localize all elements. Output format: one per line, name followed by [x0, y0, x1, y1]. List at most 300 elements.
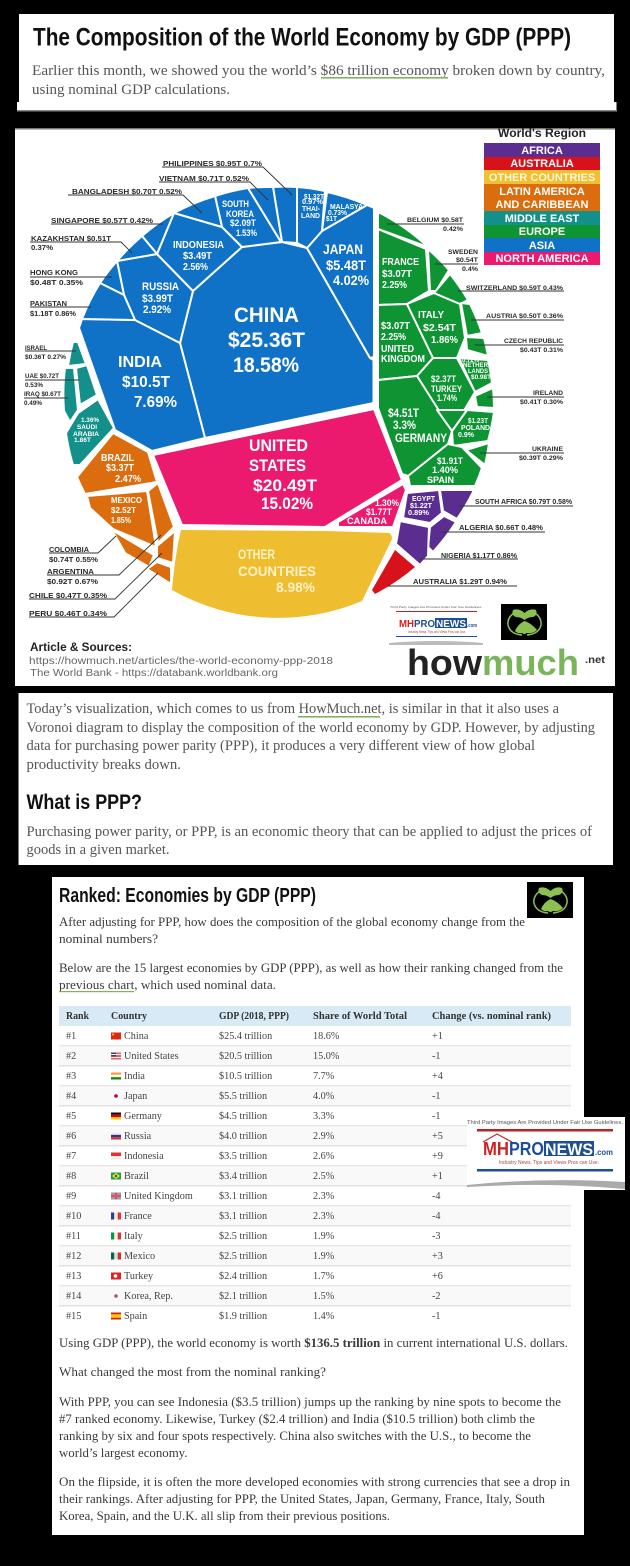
row 12: Mexico: [124, 1251, 155, 1262]
cell: Egypt: $1.22T: [410, 501, 432, 510]
closing text: Korea, Spain, and the U.K. all slip from their previous positions.: [59, 1509, 390, 1523]
row 6: [59, 1126, 571, 1146]
closing text: [59, 1336, 571, 1523]
label: Sweden: $0.54T: [456, 257, 478, 264]
logo: howmuch.net: .net: [585, 655, 606, 666]
row 15: -1: [432, 1311, 440, 1322]
row 13: [59, 1271, 571, 1286]
cells: Middle East: 1.36%: [81, 417, 99, 424]
row 2: [59, 1046, 571, 1066]
logo: MHProNews table watermark: Industry News, Tips and Views Pros can Use.: [499, 1160, 599, 1166]
logo: MHProNews chart watermark: .com: [467, 623, 477, 629]
label: Israel: ISRAEL: [25, 345, 47, 352]
row 5: #5: [66, 1111, 76, 1122]
cell: Netherlands: $0.98T: [471, 374, 491, 381]
cell: Malaysia: 0.73%: [328, 210, 348, 217]
cell: Spain: $1.91T: [437, 456, 463, 467]
row 8: [59, 1166, 571, 1186]
panel: explanation: [18, 693, 613, 865]
legend: world's region: AUSTRALIA: [510, 158, 574, 170]
legend: world's region: AFRICA: [521, 145, 563, 157]
cell: United Kingdom: $3.07T: [381, 321, 410, 332]
paragraph: PPP definition: [26, 824, 592, 858]
cell: Poland: [452, 410, 494, 446]
paragraph: PPP definition: goods in a given market.: [26, 842, 170, 858]
label: Sweden: 0.4%: [462, 266, 478, 273]
row 8: $3.4 trillion: [219, 1171, 267, 1182]
cells: Middle East: [63, 342, 114, 465]
label: Hong Kong: $0.48T 0.35%: [30, 278, 83, 287]
row 3: India: [124, 1071, 145, 1082]
row 11: Italy: [124, 1231, 144, 1242]
row 9: $3.1 trillion: [219, 1191, 267, 1202]
label: Ukraine: [480, 446, 564, 462]
cell: China: CHINA: [234, 304, 299, 327]
legend: world's region: EUROPE: [519, 226, 565, 238]
cell: Mexico: $2.52T: [111, 505, 137, 515]
logo: MHProNews chart watermark: PRO: [414, 618, 435, 630]
closing text: On the flipside, it is often the more developed economies with strong currencies that see a drop in: [59, 1475, 571, 1489]
legend: world's region: NORTH AMERICA: [495, 253, 589, 265]
logo: MHProNews table watermark: MH: [483, 1139, 509, 1159]
cell: Thailand: $1.32T: [304, 194, 325, 201]
row 7: 2.6%: [313, 1151, 335, 1162]
cell: Poland: POLAND: [461, 423, 491, 432]
intro text: Earlier this month, we showed you the world’s $86 trillion economy broken down by country,: [32, 63, 605, 79]
cell: Poland: $1.23T: [468, 416, 488, 425]
logo: green emblem: [527, 882, 573, 918]
cell: Japan: JAPAN: [323, 242, 363, 257]
label: UAE: [25, 373, 79, 389]
cell: Spain: 1.40%: [432, 465, 459, 476]
cell: Egypt: EGYPT: [412, 494, 435, 503]
cell: United Kingdom: UNITED: [381, 344, 414, 355]
cell: India: $10.5T: [122, 374, 170, 391]
row 7: #7: [66, 1151, 76, 1162]
label: Iraq: 0.49%: [24, 400, 42, 407]
table header: [59, 1006, 571, 1026]
panel: ranked economies: [52, 877, 584, 1535]
cell: China: [180, 242, 374, 438]
cell: Other Countries: [172, 530, 392, 618]
label: South Africa: SOUTH AFRICA $0.79T 0.58%: [475, 497, 572, 506]
intro paragraphs: previous chart, which used nominal data.: [59, 978, 276, 992]
article and sources: https://howmuch.net/articles/the-world-economy-ppp-2018: [29, 656, 334, 667]
closing text: With PPP, you can see Indonesia ($3.5 trillion) jumps up the ranking by nine spots to become the: [59, 1395, 561, 1409]
row 11: [59, 1231, 571, 1246]
closing text: their rankings. After adjusting for PPP, the United States, Japan, Germany, France, Italy, South: [59, 1492, 546, 1506]
cell: Japan: [307, 205, 374, 358]
row 1: China: [124, 1031, 149, 1042]
row 8: #8: [66, 1171, 76, 1182]
closing text: #7 ranked economy. Likewise, Turkey ($2.4 trillion) and India ($10.5 trillion) both climb the: [59, 1412, 535, 1426]
row 6: 2.9%: [313, 1131, 335, 1142]
label: Austria: AUSTRIA $0.50T 0.36%: [486, 313, 563, 320]
paragraph: visualization: Today’s visualization, which comes to us from HowMuch.net, is similar in that it also uses a: [26, 701, 560, 717]
row 11: 1.9%: [313, 1231, 335, 1242]
cell: Russia: RUSSIA: [142, 281, 179, 293]
row 8: 2.5%: [313, 1171, 335, 1182]
cell: France: 2.25%: [382, 279, 408, 291]
cell: Turkey: TURKEY: [431, 384, 462, 394]
cell: France: $3.07T: [382, 268, 413, 280]
intro paragraphs: [59, 915, 563, 992]
cell: Canada: 1.30%: [375, 498, 399, 509]
logo: howmuch.net: [407, 642, 606, 683]
cell: Indonesia: $3.49T: [183, 250, 213, 262]
row 13: +6: [432, 1271, 443, 1282]
label: Kazakhstan: [30, 234, 132, 253]
cells: Middle East: 1.86T: [74, 437, 92, 444]
row 4: Japan: [124, 1091, 147, 1102]
label: Ukraine: UKRAINE: [532, 446, 564, 453]
cell: Russia: $3.99T: [142, 293, 173, 305]
row 6: $4.0 trillion: [219, 1131, 267, 1142]
row 12: 1.9%: [313, 1251, 335, 1262]
cell: United States: STATES: [249, 457, 306, 475]
cell: Thailand: THAI-: [302, 206, 321, 213]
cell: Germany: 3.3%: [393, 420, 416, 432]
intro text: using nominal GDP calculations.: [32, 82, 230, 98]
cell: China: 18.58%: [233, 354, 299, 377]
label: Pakistan: PAKISTAN: [30, 299, 67, 308]
cells: other Europe: [378, 212, 494, 465]
logo: MHProNews table watermark: NEWS: [545, 1140, 593, 1159]
row 13: Turkey: [124, 1271, 154, 1282]
cell: Other Countries: OTHER: [238, 547, 275, 562]
label: Kazakhstan: 0.37%: [31, 243, 53, 252]
paragraph: visualization: productivity breaks down.: [26, 757, 181, 773]
panel: voronoi chart: [15, 128, 615, 686]
cell: Indonesia: INDONESIA: [173, 239, 224, 251]
closing text: Using GDP (PPP), the world economy is worth $136.5 trillion in current international U.S. dollars.: [59, 1336, 568, 1350]
row 2: United States: [124, 1051, 179, 1062]
label: Argentina: [47, 535, 161, 586]
cell: Russia: [117, 254, 193, 343]
cell: Malaysia: [322, 192, 367, 231]
row 5: $4.5 trillion: [219, 1111, 267, 1122]
cell: Malaysia: MALASYA: [330, 204, 363, 211]
row 13: $2.4 trillion: [219, 1271, 267, 1282]
row 8: Brazil: [124, 1171, 149, 1182]
table header: Country: [111, 1011, 147, 1022]
row 10: -4: [432, 1211, 440, 1222]
row 15: [66, 1311, 440, 1322]
row 12: +3: [432, 1251, 443, 1262]
row 3: #3: [66, 1071, 76, 1082]
cell: Netherlands: [459, 357, 492, 392]
row 11: $2.5 trillion: [219, 1231, 267, 1242]
row 14: Korea, Rep.: [124, 1291, 173, 1302]
cell: France: FRANCE: [382, 256, 419, 268]
legend: world's region: AND CARIBBEAN: [496, 199, 588, 211]
logo: MHProNews chart watermark: NEWS: [436, 619, 466, 630]
cells: other Asia: [82, 187, 297, 320]
cell: Italy: $2.54T: [423, 322, 457, 334]
cell: Turkey: [417, 358, 475, 431]
logo: howmuch.net: much: [482, 642, 579, 683]
cell: United States: 15.02%: [261, 495, 313, 513]
row 11: -3: [432, 1231, 440, 1242]
cell: Thailand: [297, 187, 325, 248]
row 2: $20.5 trillion: [219, 1051, 272, 1062]
cell: Italy: [407, 293, 465, 358]
label: Ukraine: $0.39T 0.29%: [519, 455, 563, 462]
closing text: ranking by six and four spots respectively. China also switches with the U.S., to become the: [59, 1429, 531, 1443]
row 14: $2.1 trillion: [219, 1291, 267, 1302]
cells: Middle East: ARABIA: [73, 431, 99, 438]
cell: Indonesia: 2.56%: [183, 261, 209, 273]
label: UAE: 0.53%: [25, 382, 43, 389]
paragraph: visualization: data for purchasing power parity (PPP), it produces a very different view of how global: [26, 738, 535, 754]
row 4: $5.5 trillion: [219, 1091, 267, 1102]
row 7: +9: [432, 1151, 443, 1162]
row 9: [59, 1191, 571, 1206]
row 15: Spain: [124, 1311, 147, 1322]
label: Iraq: [24, 391, 68, 407]
label: Argentina: $0.92T 0.67%: [47, 577, 98, 586]
row 5: 3.3%: [313, 1111, 335, 1122]
label: UAE: UAE $0.72T: [25, 373, 59, 380]
logo: MHProNews chart watermark: [389, 605, 483, 645]
cell: Other Countries: 8.98%: [276, 580, 315, 595]
row 15: #15: [66, 1311, 81, 1322]
label: Sweden: SWEDEN: [448, 249, 478, 256]
logo: MHProNews chart watermark: Industry News, Tips and Views Pros can Use.: [408, 630, 466, 634]
row 5: [59, 1111, 571, 1126]
cell: Germany: [378, 376, 452, 476]
paragraph: visualization: Voronoi diagram to display the composition of the world economy by GDP. However, by adjusting: [26, 720, 596, 736]
row 3: [59, 1071, 571, 1086]
cell: Brazil: [77, 433, 157, 494]
cell: Turkey: 1.74%: [437, 393, 457, 403]
label: Czech Republic: [475, 338, 564, 354]
cell: Japan: 4.02%: [333, 273, 369, 288]
row 5: Germany: [124, 1111, 163, 1122]
row 15: 1.4%: [313, 1311, 335, 1322]
intro paragraphs: Below are the 15 largest economies by GDP (PPP), as well as how their ranking changed from the: [59, 961, 563, 975]
row 14: -2: [432, 1291, 440, 1302]
cell: Poland: 0.9%: [458, 430, 474, 439]
row 8: +1: [432, 1171, 443, 1182]
cell: Brazil: BRAZIL: [101, 453, 134, 464]
cell: Spain: [408, 444, 482, 486]
legend: world's region: MIDDLE EAST: [505, 213, 580, 225]
cell: United States: UNITED: [249, 437, 308, 455]
cell: Netherlands: NETHER: [463, 362, 488, 369]
cell: United States: $20.49T: [253, 477, 317, 495]
intro paragraphs: After adjusting for PPP, how does the composition of the global economy change from the: [59, 915, 525, 929]
row 7: Indonesia: [124, 1151, 164, 1162]
row 10: France: [124, 1211, 152, 1222]
label: Argentina: ARGENTINA: [47, 567, 95, 576]
label: Belgium: 0.42%: [443, 226, 463, 233]
logo: MHProNews table watermark: .com: [595, 1148, 613, 1157]
row 5: -1: [432, 1111, 440, 1122]
row 9: 2.3%: [313, 1191, 335, 1202]
row 14: [59, 1286, 571, 1306]
row 2: -1: [432, 1051, 440, 1062]
row 12: [59, 1246, 571, 1266]
label: Kazakhstan: KAZAKHSTAN $0.51T: [31, 234, 111, 243]
cell: Thailand: LAND: [301, 213, 320, 220]
label: Bangladesh: BANGLADESH $0.70T 0.52%: [72, 187, 182, 196]
row 6: Russia: [124, 1131, 152, 1142]
row 3: +4: [432, 1071, 443, 1082]
label: Peru: PERU $0.46T 0.34%: [29, 609, 107, 618]
label: Chile: [29, 553, 162, 600]
row 1: +1: [432, 1031, 443, 1042]
logo: MHProNews table watermark: [467, 1117, 625, 1190]
cell: Netherlands: 0.72%: [462, 357, 479, 364]
cell: South Korea: KOREA: [226, 209, 254, 219]
cell: Russia: 2.92%: [143, 304, 171, 316]
label: Belgium: [387, 217, 464, 233]
paragraph: visualization: [26, 701, 596, 773]
row 3: $10.5 trillion: [219, 1071, 272, 1082]
cell: Turkey: $2.37T: [431, 374, 456, 384]
cell: South Korea: SOUTH: [222, 199, 249, 209]
label: Vietnam: [159, 174, 268, 200]
legend: world's region: ASIA: [529, 240, 555, 252]
label: Colombia: $0.74T 0.55%: [49, 555, 98, 564]
cell: Egypt: 0.89%: [408, 508, 429, 517]
legend: world's region: [484, 128, 600, 265]
row 1: [59, 1031, 571, 1046]
cell: Mexico: 1.85%: [111, 515, 131, 525]
cell: India: 7.69%: [134, 394, 177, 411]
cell: Mexico: MEXICO: [111, 495, 142, 505]
row 7: $3.5 trillion: [219, 1151, 267, 1162]
cell: Germany: $4.51T: [388, 408, 419, 420]
label: Czech Republic: $0.43T 0.31%: [520, 347, 563, 354]
table header: Share of World Total: [313, 1011, 407, 1022]
cell: Italy: 1.86%: [431, 334, 459, 346]
ranking table: [59, 1006, 571, 1322]
label: Australia: AUSTRALIA $1.29T 0.94%: [413, 577, 507, 586]
legend: world's region: OTHER COUNTRIES: [489, 172, 595, 184]
cell: South Korea: 1.53%: [236, 228, 257, 238]
row 4: 4.0%: [313, 1091, 335, 1102]
legend: world's region: World's Region: [498, 128, 586, 140]
cell: Netherlands: LANDS: [468, 368, 489, 375]
logo: MHProNews table watermark: Third Party Images Are Provided Under Fair Use Guidelines.: [467, 1120, 623, 1126]
row 10: $3.1 trillion: [219, 1211, 267, 1222]
cell: Thailand: 0.97%: [302, 199, 324, 206]
logo: howmuch.net: how: [407, 642, 483, 683]
label: Philippines: PHILIPPINES $0.95T 0.7%: [163, 159, 262, 168]
label: Chile: CHILE $0.47T 0.35%: [29, 591, 107, 600]
label: Israel: [25, 345, 76, 361]
cell: Italy: ITALY: [418, 309, 444, 321]
cell: United Kingdom: 2.25%: [381, 332, 406, 343]
row 14: 1.5%: [313, 1291, 335, 1302]
cell: United States: [153, 409, 402, 527]
heading: What is PPP?: What is PPP?: [26, 791, 142, 814]
heading: ranked: Ranked: Economies by GDP (PPP): [59, 885, 316, 907]
cell: India: INDIA: [118, 354, 162, 371]
cell: India: [79, 319, 205, 451]
closing text: What changed the most from the nominal ranking?: [59, 1365, 326, 1379]
cell: Canada: CANADA: [347, 516, 387, 527]
row 15: $1.9 trillion: [219, 1311, 267, 1322]
row 12: #12: [66, 1251, 81, 1262]
row 6: +5: [432, 1131, 443, 1142]
cell: South Korea: $2.09T: [230, 218, 256, 228]
logo: MHProNews chart watermark: Third Party Images Are Provided Under Fair Use Guidelines.: [390, 605, 482, 609]
label: Pakistan: [30, 299, 91, 318]
article and sources: [29, 642, 334, 679]
logo: MHProNews chart watermark: MH: [399, 618, 414, 630]
cell: France: [378, 229, 429, 305]
row 10: #10: [66, 1211, 81, 1222]
label: Czech Republic: CZECH REPUBLIC: [504, 338, 563, 345]
label: Peru: [29, 573, 158, 618]
row 13: 1.7%: [313, 1271, 335, 1282]
cell: Japan: $5.48T: [326, 258, 367, 273]
legend: world's region: LATIN AMERICA: [499, 186, 585, 198]
label: Hong Kong: HONG KONG: [30, 268, 78, 277]
row 11: #11: [66, 1231, 81, 1242]
row 1: 18.6%: [313, 1031, 340, 1042]
cell: United Kingdom: KINGDOM: [381, 354, 425, 365]
label: Algeria: ALGERIA $0.66T 0.48%: [459, 523, 543, 532]
intro paragraphs: nominal numbers?: [59, 932, 158, 946]
logo: green emblem: [501, 604, 547, 640]
cells: Middle East: SAUDI: [77, 424, 97, 431]
label: Nigeria: NIGERIA $1.17T 0.86%: [441, 551, 517, 560]
cell: United Kingdom: [378, 304, 433, 380]
table header: GDP (2018, PPP): [219, 1011, 289, 1022]
table header: Rank: [66, 1011, 89, 1022]
cell: Mexico: [87, 491, 156, 547]
label: Ireland: IRELAND: [533, 390, 563, 397]
cell: Spain: SPAIN: [427, 475, 454, 486]
cell: Canada: $1.77T: [366, 507, 392, 518]
row 1: $25.4 trillion: [219, 1031, 272, 1042]
cell: Malaysia: $1T: [326, 216, 338, 223]
row 10: 2.3%: [313, 1211, 335, 1222]
row 14: #14: [66, 1291, 81, 1302]
row 4: #4: [66, 1091, 76, 1102]
cell: Brazil: 2.47%: [115, 474, 141, 485]
cell: Indonesia: [157, 213, 242, 291]
cells: other Latin America: [112, 483, 175, 584]
row 9: United Kingdom: [124, 1191, 193, 1202]
label: Philippines: [162, 159, 292, 195]
label: Ireland: [487, 390, 564, 406]
label: Colombia: COLOMBIA: [49, 545, 89, 554]
row 12: $2.5 trillion: [219, 1251, 267, 1262]
cells: other Africa: [396, 490, 474, 565]
row 9: -4: [432, 1191, 440, 1202]
row 7: [59, 1151, 571, 1166]
cell: Other Countries: COUNTRIES: [238, 564, 316, 579]
row 4: [59, 1086, 571, 1106]
intro text: [32, 63, 605, 98]
label: Israel: $0.36T 0.27%: [25, 354, 66, 361]
cell: China: $25.36T: [228, 329, 305, 352]
label: Switzerland: SWITZERLAND $0.59T 0.43%: [466, 285, 563, 292]
row 3: 7.7%: [313, 1071, 335, 1082]
row 1: #1: [66, 1031, 76, 1042]
logo: MHProNews table watermark: PRO: [509, 1139, 544, 1159]
panel: intro: [17, 14, 617, 112]
label: Bangladesh: [68, 187, 202, 213]
label: Singapore: SINGAPORE $0.57T 0.42%: [51, 216, 153, 225]
article and sources: The World Bank - https://databank.worldbank.org: [30, 668, 278, 679]
cell: Canada: [338, 484, 406, 527]
